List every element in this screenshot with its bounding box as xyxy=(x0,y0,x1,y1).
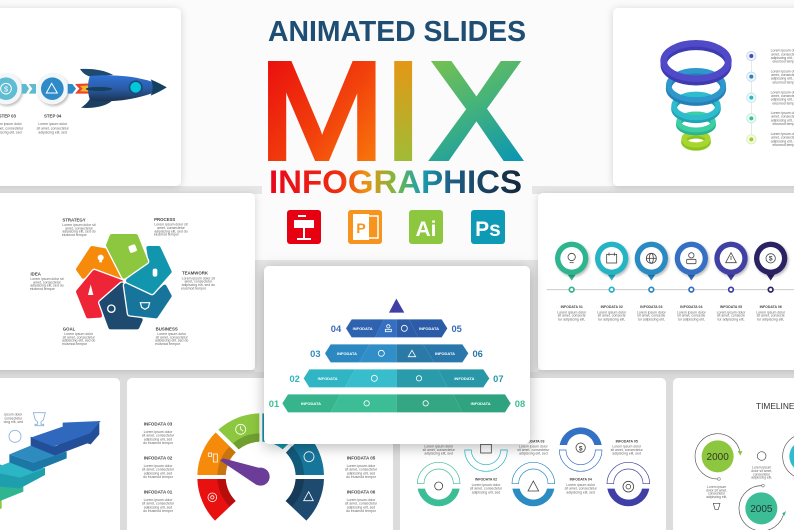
ring labels: INFODATA 04 xyxy=(570,478,592,482)
flower labels: eiusmod tempor xyxy=(62,233,88,237)
flower labels: adipiscing elit, sed do xyxy=(154,229,188,233)
pin labels: Lorem ipsum dolor xyxy=(677,310,707,314)
year 2005: 2005 xyxy=(750,504,773,515)
ring 2 teal xyxy=(465,444,507,471)
stair icons and text: ipsum dolor xyxy=(4,413,23,417)
pin labels: INFODATA 04 xyxy=(680,305,702,309)
pyramid row 3: 03 xyxy=(310,349,321,359)
pyramid row 4: INFODATA xyxy=(353,326,373,331)
pyramid row 1 xyxy=(269,394,525,412)
ring labels: Lorem ipsum dolor xyxy=(519,444,549,448)
title: MIX: X xyxy=(430,34,522,188)
stair icons and text xyxy=(4,413,45,442)
pyramid row 2 xyxy=(289,369,504,387)
gauge labels: sit amet, consectetur xyxy=(142,502,175,506)
flower labels: amet, consectetur xyxy=(65,226,94,230)
pin labels: tur adipiscing elit, xyxy=(678,317,705,321)
flower labels: eiusmod tempor xyxy=(181,286,207,290)
pin labels: tur adipiscing elit, xyxy=(598,317,625,321)
pyramid row 4 xyxy=(331,319,462,337)
panel: funnel rings xyxy=(613,8,794,186)
icon: photoshop xyxy=(471,210,505,244)
flower labels: Lorem ipsum dolor sit xyxy=(62,223,96,227)
stair icons and text: consectetur xyxy=(4,416,23,420)
ring labels: Lorem ipsum dolor xyxy=(472,483,501,487)
ring labels: sit amet, consectetur xyxy=(565,487,598,491)
gauge labels: Lorem ipsum dolor xyxy=(347,464,376,468)
gap bands xyxy=(0,186,794,530)
step labels xyxy=(0,114,70,135)
timeline icons and text: consectetur xyxy=(708,492,726,496)
gauge labels: INFODATA 03 xyxy=(144,422,173,427)
panel: pyramid xyxy=(264,266,530,444)
gauge chart xyxy=(197,413,324,521)
pin labels: sit amet, consecte xyxy=(757,314,785,318)
pin labels: INFODATA 03 xyxy=(640,305,662,309)
flower labels: Lorem ipsum dolor sit xyxy=(30,277,64,281)
pin 1 xyxy=(555,242,588,292)
flower labels: Lorem ipsum dolor sit xyxy=(182,276,215,280)
flower labels: eiusmod tempor xyxy=(155,342,181,346)
gauge labels: do eiusmod tempor xyxy=(143,441,174,445)
gauge labels: Lorem ipsum dolor xyxy=(144,498,173,502)
panel: gauge xyxy=(127,378,393,530)
ring labels: INFODATA 05 xyxy=(616,439,638,443)
pyramid row 2: 02 xyxy=(289,374,300,384)
flower labels: Lorem ipsum dolor sit xyxy=(154,223,188,227)
timeline icons and text: Lorem ipsum xyxy=(707,485,727,489)
flower icons xyxy=(88,244,157,312)
ring labels: sit amet, consectetur xyxy=(517,448,550,452)
flower labels: adipiscing elit, sed do xyxy=(62,230,96,234)
timeline icons and text: dolor sit amet, xyxy=(706,488,727,492)
ring labels: Lorem ipsum dolor xyxy=(612,444,642,448)
icon: powerpoint: P xyxy=(356,220,366,236)
pin 4 xyxy=(675,242,708,292)
gauge labels: sit amet, consectetur xyxy=(142,468,175,472)
ring labels: sit amet, consectetur xyxy=(470,487,503,491)
pin labels: Lorem ipsum dolor xyxy=(756,310,786,314)
stair chart xyxy=(0,421,101,509)
title: animated slides: ANIMATED SLIDES xyxy=(268,16,526,48)
rocket step circles: $ xyxy=(4,84,8,93)
ring 4 dark blue xyxy=(559,427,602,471)
year 2010 circle xyxy=(783,434,794,479)
pin labels: sit amet, consecte xyxy=(677,314,705,318)
flower labels: amet, consectetur xyxy=(33,280,62,284)
flower labels: amet, consectetur xyxy=(157,226,186,230)
title: infographics: INFOGRAPHICS xyxy=(269,164,522,200)
flower labels: IDEA xyxy=(30,271,42,276)
gauge labels: Lorem ipsum dolor xyxy=(144,430,173,434)
pyramid row 1: INFODATA xyxy=(301,401,321,406)
gauge icons xyxy=(208,424,314,502)
flower labels: eiusmod tempor xyxy=(154,233,180,237)
pin labels: tur adipiscing elit, xyxy=(558,317,585,321)
icon: photoshop: Ps xyxy=(475,218,501,241)
timeline icons and text: dolor sit amet, xyxy=(751,469,772,473)
flower labels: adipiscing elit, sed do xyxy=(182,283,215,287)
gauge labels: do eiusmod tempor xyxy=(346,509,377,513)
pyramid row 3: INFODATA xyxy=(435,351,455,356)
pin labels: Lorem ipsum dolor xyxy=(557,310,587,314)
pyramid row 2: INFODATA xyxy=(454,376,474,381)
gauge needle xyxy=(220,458,270,486)
gauge labels: INFODATA 01 xyxy=(144,490,173,495)
pin labels xyxy=(557,305,786,321)
ring labels: sit amet, consectetur xyxy=(423,448,456,452)
flower labels: TEAMWORK xyxy=(182,271,209,276)
flower labels: sit amet, consectetur xyxy=(63,335,96,339)
ring labels: adipiscing elit, sed xyxy=(424,452,453,456)
pin labels: sit amet, consecte xyxy=(598,314,626,318)
step labels: Lorem ipsum dolor xyxy=(38,122,68,126)
icon: rocket xyxy=(75,69,167,108)
ring labels: INFODATA 03 xyxy=(522,439,544,443)
gauge labels: INFODATA 05 xyxy=(347,456,376,461)
ring labels: Lorem ipsum dolor xyxy=(566,483,596,487)
ring 3 blue xyxy=(512,462,555,506)
gauge labels: sit amet, consectetur xyxy=(142,434,175,438)
ring 4 dark blue: $ xyxy=(579,445,583,452)
flower labels: BUSINESS xyxy=(156,326,178,331)
pin 3 xyxy=(635,242,668,292)
pyramid row 4: INFODATA xyxy=(419,326,439,331)
icon: keynote xyxy=(287,210,321,244)
pin labels: Lorem ipsum dolor xyxy=(637,310,667,314)
flower labels: Lorem ipsum dolor xyxy=(64,332,94,336)
ring labels: INFODATA 02 xyxy=(475,478,497,482)
step labels: adipiscing elit, sed xyxy=(38,131,67,135)
panel: timeline xyxy=(673,378,794,530)
panel: pentagon flower xyxy=(0,193,255,370)
pyramid row 2: 07 xyxy=(493,374,504,384)
ring 1 green xyxy=(417,462,460,506)
ring labels: adipiscing elit, sed xyxy=(566,490,595,494)
pin labels: tur adipiscing elit, xyxy=(718,317,744,321)
flower labels: adipiscing elit, sed do xyxy=(155,339,188,343)
pyramid apex xyxy=(389,299,404,313)
timeline icons and text: consectetur xyxy=(753,472,771,476)
timeline icons and text xyxy=(706,452,772,509)
pin 6 xyxy=(754,242,787,292)
gauge labels: do eiusmod tempor xyxy=(143,509,174,513)
panel: pin timeline xyxy=(538,193,794,370)
pin labels: sit amet, consecte xyxy=(637,314,665,318)
flower labels: amet, consectetur xyxy=(184,280,213,284)
pin 5 xyxy=(714,242,748,292)
timeline icons and text: adipiscing elit, xyxy=(706,495,727,499)
ring labels: Lorem ipsum dolor xyxy=(424,444,454,448)
ring 5 indigo xyxy=(607,462,650,506)
panel: rocket steps xyxy=(0,8,181,186)
gauge labels: do eiusmod tempor xyxy=(143,475,174,479)
flower labels: STRATEGY xyxy=(62,217,86,222)
icon: illustrator xyxy=(409,210,443,244)
icon: powerpoint xyxy=(348,210,382,244)
gauge labels: adipiscing elit, sed xyxy=(144,437,172,441)
flower labels: sit amet, consectetur xyxy=(156,335,189,339)
flower labels: adipiscing elit, sed do xyxy=(62,339,95,343)
icon: illustrator: Ai xyxy=(416,218,436,241)
title: MIX: I xyxy=(384,34,422,188)
stair icons and text: cing elit, sed xyxy=(4,420,23,424)
gauge labels: INFODATA 02 xyxy=(144,456,173,461)
pin 6: $ xyxy=(769,256,773,263)
pin labels: Lorem ipsum dolor xyxy=(597,310,627,314)
flower labels xyxy=(30,217,215,346)
ring labels: sit amet, consectetur xyxy=(611,448,644,452)
gauge labels: adipiscing elit, sed xyxy=(144,505,172,509)
pyramid row 1: INFODATA xyxy=(471,401,491,406)
flower labels: PROCESS xyxy=(154,217,175,222)
gauge labels: sit amet, consectetur xyxy=(345,502,378,506)
timeline icons and text: adipiscing elit, xyxy=(751,476,772,480)
pin 2 xyxy=(595,242,628,292)
pyramid row 1: 01 xyxy=(269,399,279,409)
gauge labels: do eiusmod tempor xyxy=(346,475,377,479)
pyramid row 3: 06 xyxy=(472,349,483,359)
pyramid row 4: 05 xyxy=(451,324,462,334)
funnel chart xyxy=(664,43,728,148)
step labels: sit amet, consectetur xyxy=(37,126,70,130)
flower chart xyxy=(78,236,170,327)
pin labels: sit amet, consecte xyxy=(717,314,745,318)
pyramid row 3 xyxy=(310,344,483,362)
timeline line xyxy=(547,288,794,291)
pyramid row 3: INFODATA xyxy=(337,351,357,356)
gauge labels: adipiscing elit, sed xyxy=(347,505,375,509)
timeline icons and text: Lorem ipsum xyxy=(752,466,772,470)
pin labels: INFODATA 06 xyxy=(760,305,782,309)
pin labels: tur adipiscing elit, xyxy=(757,317,784,321)
pin labels: Lorem ipsum dolor xyxy=(717,310,746,314)
gauge labels: sit amet, consectetur xyxy=(345,468,378,472)
pin labels: INFODATA 01 xyxy=(561,305,583,309)
ring labels: adipiscing elit, sed xyxy=(519,452,548,456)
gauge labels: adipiscing elit, sed xyxy=(347,471,375,475)
funnel legend text xyxy=(771,49,794,147)
pyramid row 4: 04 xyxy=(331,324,342,334)
flower labels: GOAL xyxy=(63,326,76,331)
flower labels: eiusmod tempor xyxy=(30,287,56,291)
pyramid row 1: 08 xyxy=(515,399,525,409)
gauge labels: INFODATA 06 xyxy=(347,490,376,495)
gauge labels: Lorem ipsum dolor xyxy=(347,498,376,502)
ring labels: adipiscing elit, sed xyxy=(472,490,500,494)
gauge labels: Lorem ipsum dolor xyxy=(144,464,173,468)
pin labels: INFODATA 05 xyxy=(720,305,742,309)
pin labels: INFODATA 02 xyxy=(601,305,623,309)
gauge labels: adipiscing elit, sed xyxy=(144,471,172,475)
pyramid row 2: INFODATA xyxy=(318,376,338,381)
year 2000: 2000 xyxy=(707,452,729,463)
pin labels: tur adipiscing elit, xyxy=(638,317,665,321)
rocket step circles xyxy=(0,73,76,104)
funnel legend markers xyxy=(747,51,756,144)
step labels: STEP 04 xyxy=(44,114,62,119)
flower labels: eiusmod tempor xyxy=(62,342,88,346)
ring labels: adipiscing elit, sed xyxy=(612,452,641,456)
pin labels: sit amet, consecte xyxy=(558,314,586,318)
panel: stair arrow xyxy=(0,378,120,530)
timeline heading: TIMELINE xyxy=(756,401,794,411)
ring labels xyxy=(423,439,644,494)
flower labels: adipiscing elit, sed do xyxy=(30,284,64,288)
panel: half-ring circles xyxy=(400,378,666,530)
title: MIX: M xyxy=(258,34,385,188)
title: MIX xyxy=(258,34,522,188)
gauge labels xyxy=(142,422,378,513)
flower labels: Lorem ipsum dolor xyxy=(157,332,187,336)
